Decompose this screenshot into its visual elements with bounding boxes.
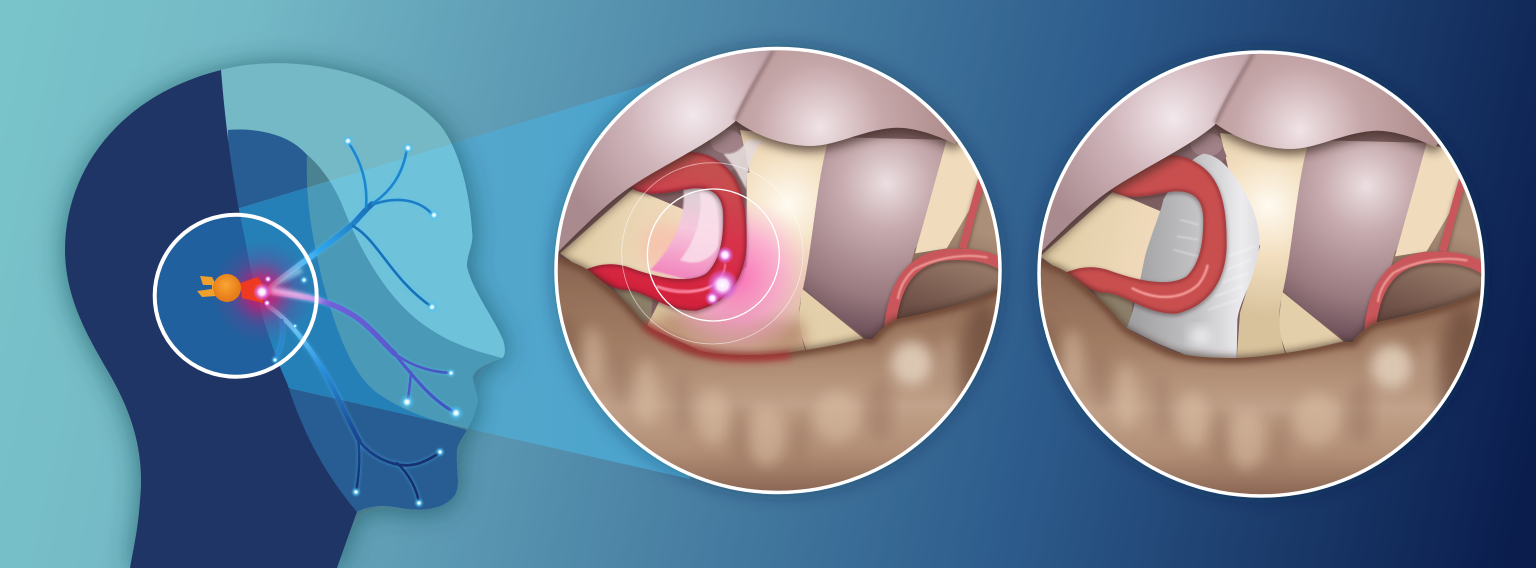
zoom circle fill over navy xyxy=(156,216,278,375)
upper nerve branch xyxy=(270,142,433,307)
nerve root with compression glow xyxy=(197,240,325,344)
lower nerve branch xyxy=(268,306,440,503)
zoom circle outline xyxy=(155,215,317,377)
head silhouette xyxy=(65,63,505,568)
back of head navy xyxy=(65,70,357,568)
magnification cone xyxy=(237,74,690,479)
translucent nerve in loop xyxy=(650,186,723,278)
middle nerve branch xyxy=(268,292,456,413)
pain sparks xyxy=(657,263,725,291)
face layers lit by cone xyxy=(238,144,505,428)
nerve end sparks xyxy=(271,135,464,508)
inflamed tissue xyxy=(647,140,828,355)
panel: compressed nerve view xyxy=(540,33,1023,513)
artery highlight xyxy=(1132,265,1208,297)
artery relocated xyxy=(1065,155,1227,314)
artery compressing nerve xyxy=(585,152,747,311)
pink glow xyxy=(668,201,806,350)
white nerve stalk xyxy=(723,140,763,190)
peach glow on left nerve xyxy=(642,223,678,266)
pulse rings xyxy=(647,189,779,321)
grey nerve with padding xyxy=(1127,154,1259,358)
panel: decompressed nerve view xyxy=(1030,45,1485,500)
nerve ribs xyxy=(1174,219,1227,310)
darkened tissue near lower edge xyxy=(647,310,807,355)
artery highlight xyxy=(657,285,713,292)
facial nerve branches xyxy=(268,142,456,503)
red inflammation on brown lobe xyxy=(645,325,790,357)
